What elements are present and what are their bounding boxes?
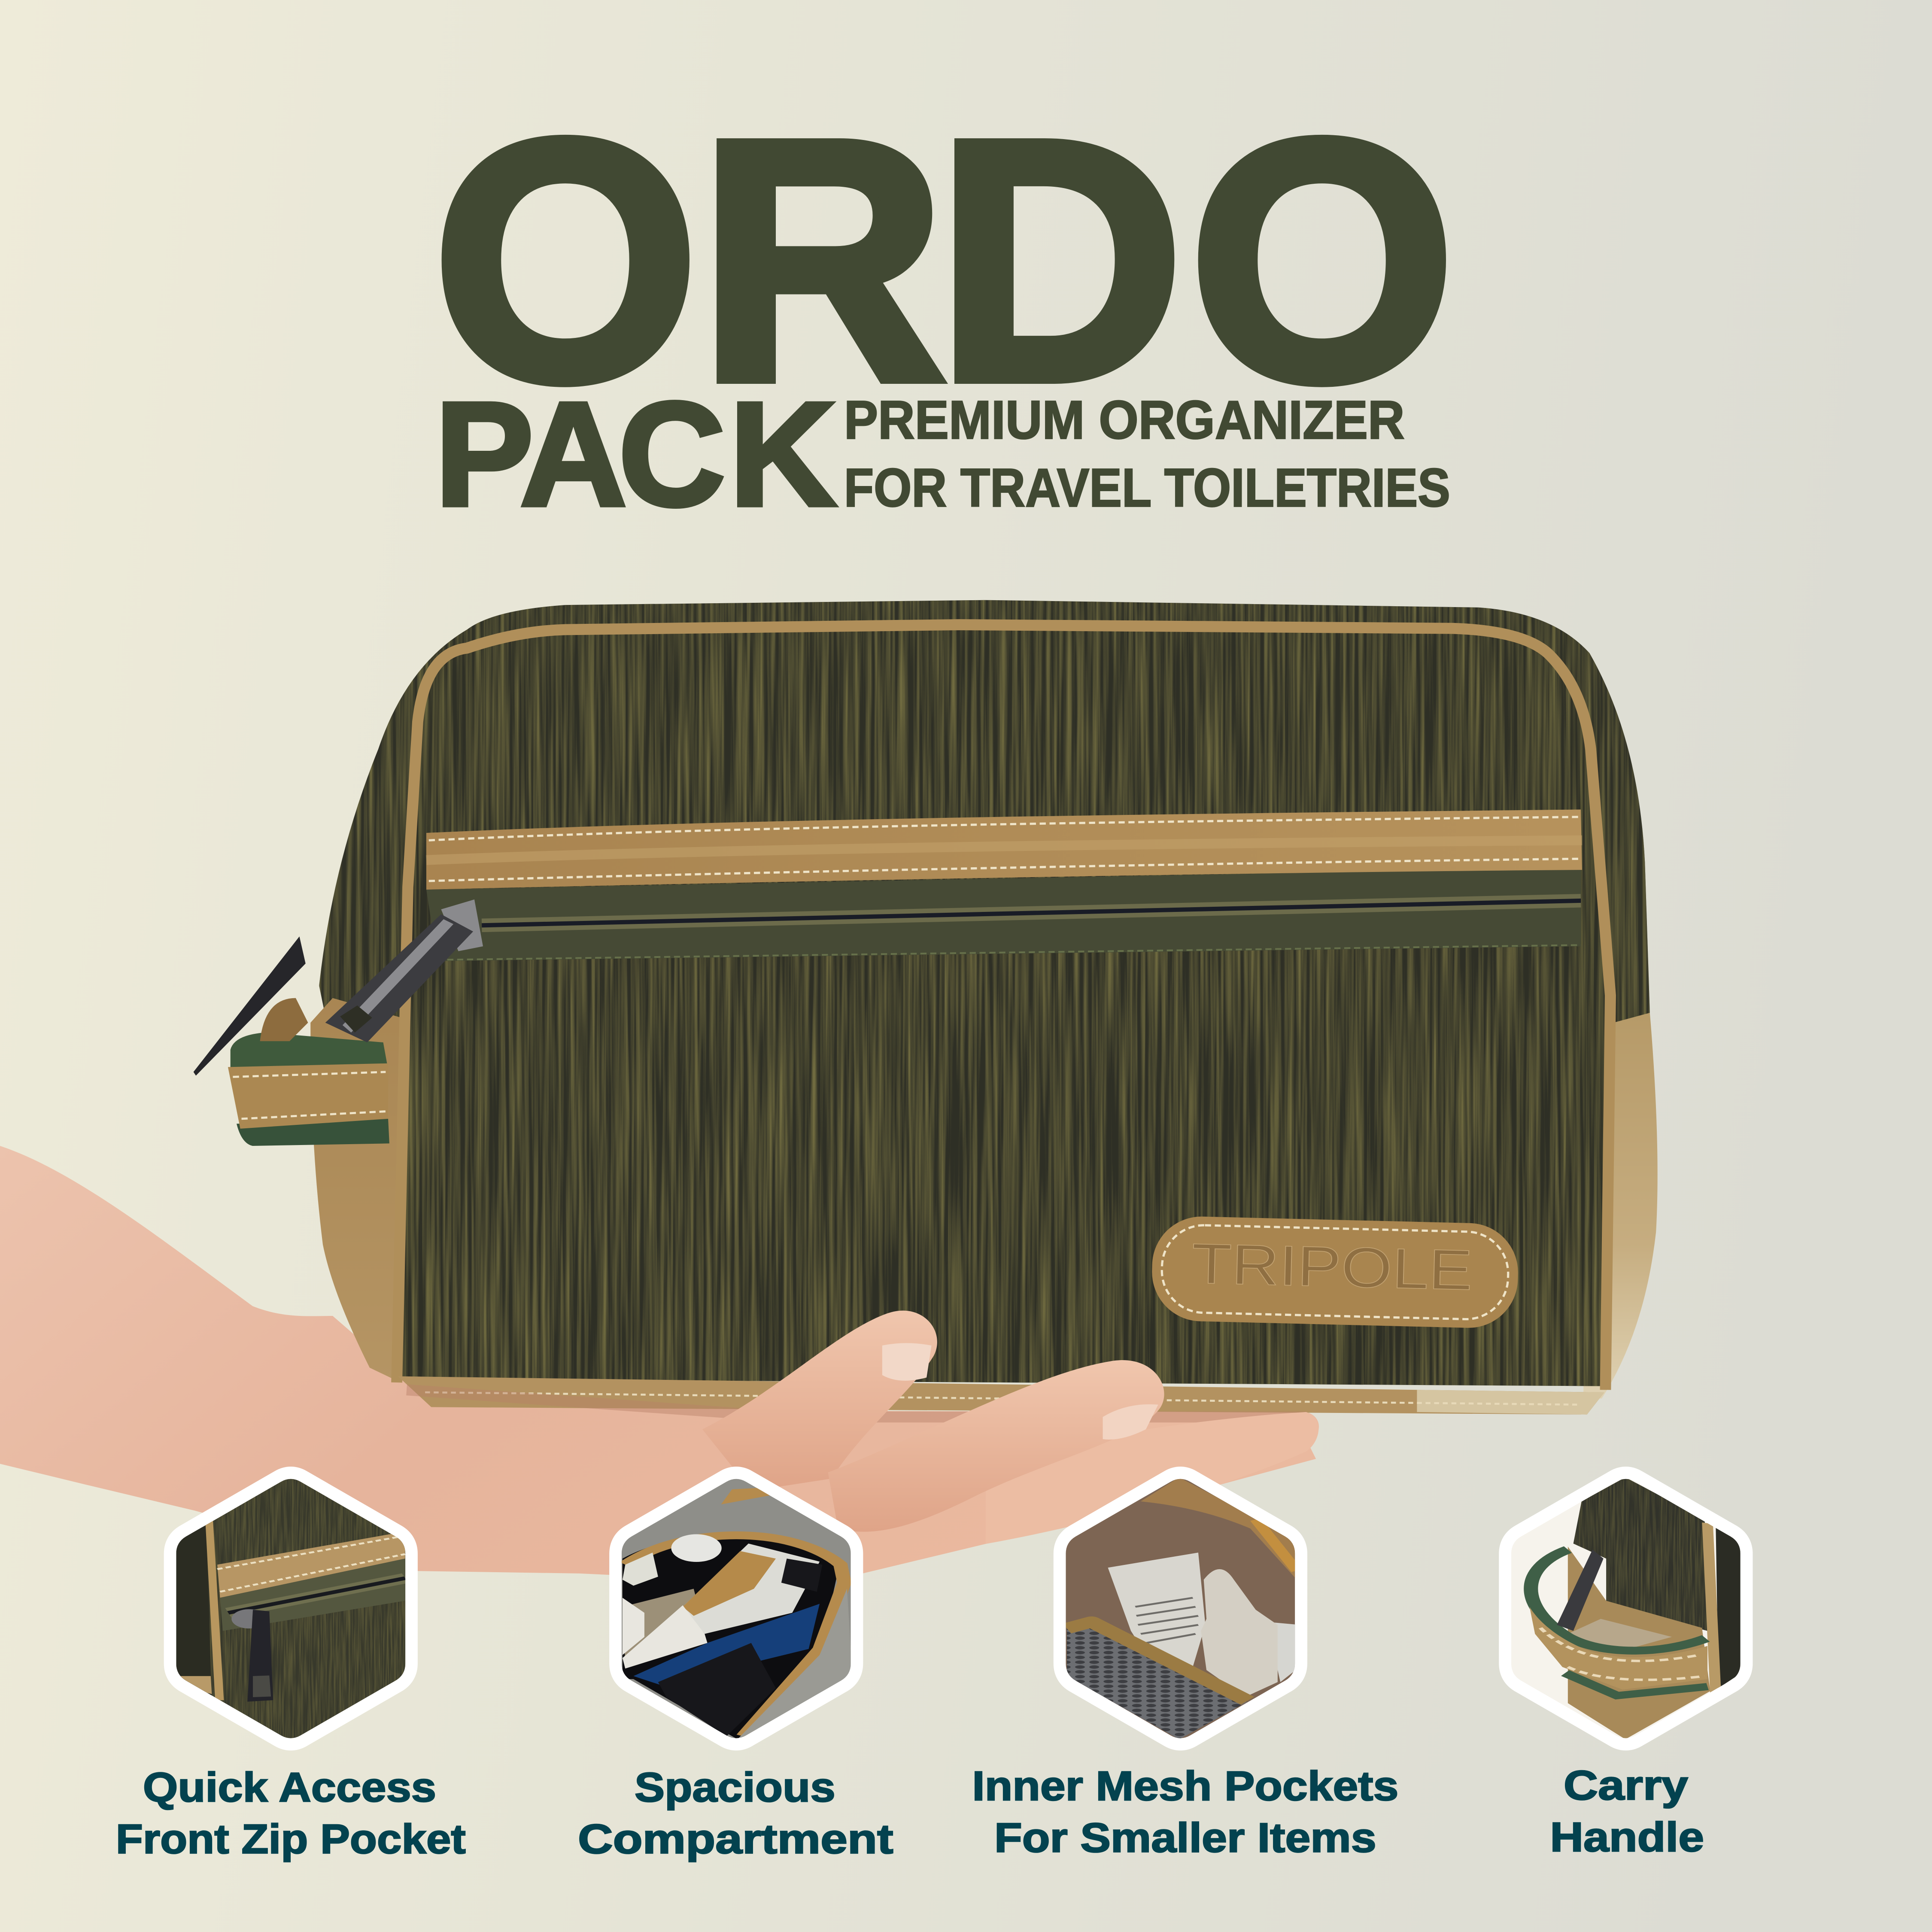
caption: Inner Mesh Pockets	[972, 1763, 1398, 1809]
band stitching	[429, 817, 1580, 881]
thumb	[702, 1311, 937, 1491]
hexagon photo	[611, 1474, 863, 1745]
hexagon frame	[176, 1479, 405, 1738]
caption: Carry	[1564, 1762, 1688, 1808]
front fabric panel	[402, 1020, 1605, 1386]
hexagon photo	[1059, 1474, 1305, 1745]
heading: ORDO: ORDO	[432, 69, 1455, 452]
product: toiletry bag	[194, 592, 1663, 1415]
tape stitching	[437, 945, 1581, 960]
logo patch	[1151, 1215, 1519, 1329]
index finger	[828, 1360, 1164, 1532]
front zip tape	[426, 867, 1581, 961]
leather band	[426, 810, 1582, 890]
brand text: TRIPOLE	[1191, 1231, 1473, 1302]
lower finger	[986, 1412, 1318, 1544]
caption: Compartment	[578, 1816, 893, 1862]
feature 1: front zip pocket	[116, 1474, 466, 1862]
feature 4: carry handle	[1502, 1474, 1749, 1860]
caption	[1550, 1762, 1704, 1860]
caption: Spacious	[635, 1765, 835, 1810]
zip teeth	[482, 901, 1581, 925]
heading: PACK: PACK	[435, 371, 836, 537]
hexagon photo	[168, 1474, 414, 1745]
leather base strip	[398, 1376, 1604, 1415]
subtitle line 1: PREMIUM ORGANIZER	[844, 390, 1405, 450]
bag rear fabric and top	[319, 600, 1650, 1022]
hand: arm and palm behind bag	[0, 1146, 1319, 1581]
handle	[228, 1033, 389, 1146]
hexagon frame	[1066, 1479, 1295, 1738]
right leather gusset	[1583, 1013, 1658, 1398]
hand: thumb and fingers over bag	[407, 1311, 1318, 1544]
caption	[116, 1765, 466, 1862]
shadow under bag	[407, 1390, 1306, 1417]
subtitle line 2: FOR TRAVEL TOILETRIES	[844, 458, 1450, 518]
leather piping	[397, 625, 1610, 1390]
caption: Handle	[1550, 1814, 1704, 1860]
feature 2: spacious compartment	[578, 1474, 893, 1862]
left leather gusset	[310, 998, 419, 1382]
finger nail	[1103, 1404, 1158, 1440]
caption: Quick Access	[143, 1765, 436, 1810]
feature 3: inner mesh pockets	[972, 1474, 1398, 1861]
caption	[972, 1763, 1398, 1861]
caption	[578, 1765, 893, 1862]
hexagon photo	[1502, 1474, 1749, 1745]
caption: Front Zip Pocket	[116, 1816, 466, 1862]
caption: For Smaller Items	[994, 1815, 1376, 1861]
zipper pull	[194, 899, 483, 1075]
title: ORDO PACK	[432, 69, 1455, 537]
base stitching	[425, 1392, 1577, 1405]
hexagon frame	[1511, 1479, 1741, 1738]
hexagon frame	[622, 1479, 851, 1738]
thumb nail	[882, 1343, 932, 1381]
